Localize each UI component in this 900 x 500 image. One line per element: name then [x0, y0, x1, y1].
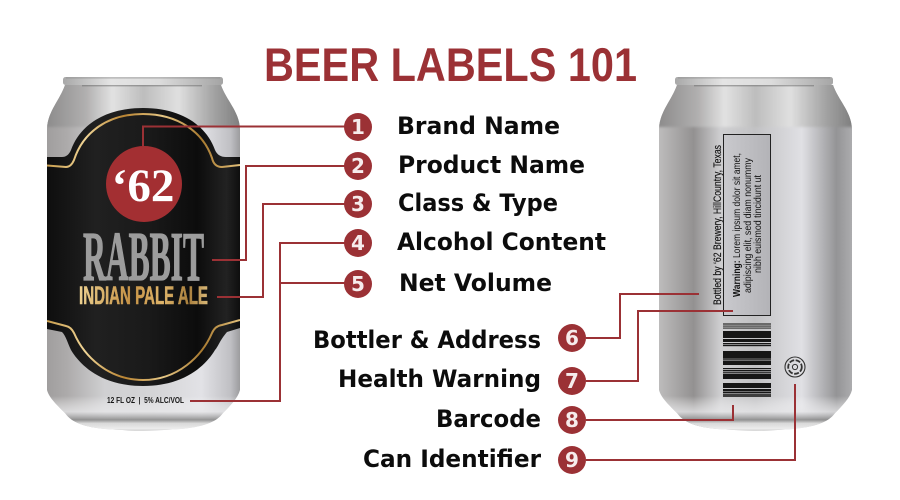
right can: back of beer can [652, 77, 862, 435]
class and type: INDIAN PALE ALE [79, 282, 208, 310]
label: bottler and address: Bottler & Address [313, 326, 541, 354]
marker 7 [558, 367, 586, 395]
can body [47, 85, 240, 430]
marker 3 [344, 190, 372, 218]
marker 1 [344, 113, 372, 141]
marker 4 [344, 229, 372, 257]
label: brand name: Brand Name [397, 112, 560, 140]
alcohol and net volume text: 12 FL OZ | 5% ALC/VOL [107, 396, 184, 405]
label: class and type: Class & Type [398, 189, 558, 217]
marker 8 [558, 406, 586, 434]
marker 9 [558, 446, 586, 474]
marker 6: 6 [565, 326, 579, 350]
label: health warning: Health Warning [338, 365, 541, 393]
marker 6 [558, 324, 586, 352]
can identifier icon [785, 357, 805, 377]
black label with gold trim [47, 108, 240, 386]
barcode [723, 323, 771, 397]
connector lines: 6 to 9 [586, 294, 795, 460]
left can: front of beer can: RABBIT [83, 219, 204, 296]
can body [652, 77, 862, 435]
marker 5 [344, 270, 372, 298]
left can: front of beer can [40, 77, 250, 435]
health warning box: Warning: Lorem ipsum dolor sit amet, [731, 153, 743, 297]
marker 2: 2 [351, 154, 365, 178]
marker 4: 4 [351, 231, 365, 255]
marker 1: 1 [351, 115, 365, 139]
brand logo [106, 146, 182, 222]
can rim [63, 77, 223, 86]
health warning box [724, 134, 770, 316]
marker 5: 5 [351, 272, 365, 296]
marker 9: 9 [565, 448, 579, 472]
health warning box: nibh euismod tincidunt ut [752, 175, 764, 273]
bottler address text: Bottled by ‘62 Brewery, HillCountry, Texas [712, 145, 724, 305]
label: product name: Product Name [398, 151, 585, 179]
label: barcode: Barcode [436, 405, 541, 433]
marker 3: 3 [351, 192, 365, 216]
marker 2 [344, 152, 372, 180]
label: net volume: Net Volume [399, 269, 552, 297]
connector lines: 1 to 5 [143, 126, 345, 401]
marker 7: 7 [565, 369, 579, 393]
title: BEER LABELS 101 [264, 38, 637, 91]
health warning box: adipiscing elit, sed diam nonummy [742, 157, 754, 293]
label: can identifier: Can Identifier [363, 445, 541, 473]
marker 8: 8 [565, 408, 579, 432]
brand logo: ‘62 [112, 160, 174, 212]
label: alcohol content: Alcohol Content [397, 228, 606, 256]
